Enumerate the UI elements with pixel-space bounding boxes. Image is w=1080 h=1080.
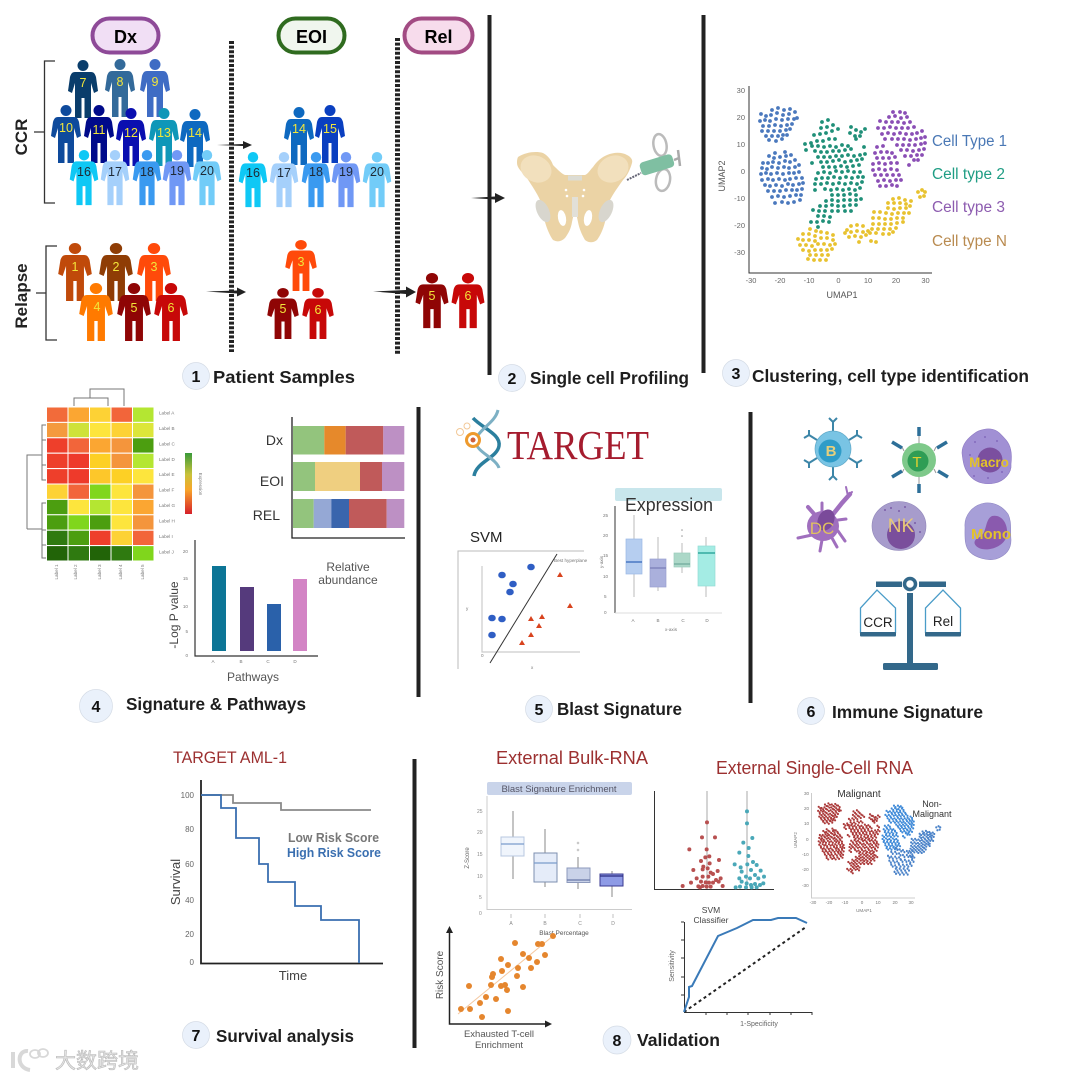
patients: Dx CCR: 11 [93,123,106,137]
chart: UMAP clusters: 20 [892,276,900,285]
patients: EOI CCR: 16 [246,166,260,180]
patients: EOI CCR: 19 [339,165,353,179]
chart: expression box plot: 10 [603,574,609,579]
icon: bone marrow syringe [627,133,680,192]
patients: Dx CCR: 20 [200,164,214,178]
heading: clustering [722,360,1029,386]
chart: malignant vs non-malignant UMAP: -30 [810,900,817,905]
chart: heatmap: Label 1 [54,564,59,580]
chart: stacked bars relative abundance: Dx [266,432,283,448]
panel: 1 patient samples [12,18,484,390]
patients: EOI relapse [267,240,334,339]
legend: cell types: Cell type 3 [932,199,1005,216]
patients: EOI relapse: 3 [298,255,305,269]
chart: heatmap: Label A [159,410,175,416]
patients: Dx relapse: 6 [168,301,175,315]
chart: malignant vs non-malignant UMAP: 30 [908,900,914,905]
chart: malignant vs non-malignant UMAP: 30 [804,791,810,796]
chart: SVM classifier ROC [669,905,812,1028]
chart: UMAP clusters: 10 [864,276,872,285]
heading: validation [603,1026,720,1054]
chart: expression box plot: A [631,618,635,623]
chart: expression box plot [599,488,722,632]
subtitle: External Single-Cell RNA: External Single-Cell RNA [716,758,913,778]
chart: risk score scatter [435,926,556,1051]
chart: Kaplan-Meier survival: High Risk Score [287,846,381,860]
patients: Dx CCR: 12 [124,126,138,140]
chart: malignant vs non-malignant UMAP: Non- [922,799,942,809]
patients: Dx CCR: 7 [80,76,87,90]
chart: malignant vs non-malignant UMAP: Malignant [912,809,952,819]
chart: malignant vs non-malignant UMAP: UMAP2 [793,832,798,848]
icon: macrophage [962,429,1011,484]
chart: blast signature enrichment box plot: D [611,921,615,927]
patients: Dx CCR [51,59,221,205]
heading: immune signature [798,698,983,724]
chart: UMAP clusters: UMAP2 [717,160,727,192]
heading: survival analysis: Survival analysis [216,1026,354,1046]
chart: malignant vs non-malignant UMAP: -10 [802,852,809,857]
chart: heatmap: Label B [159,426,175,431]
chart: malignant vs non-malignant UMAP: 10 [804,821,810,826]
icon: dendritic cell [798,487,852,551]
bracket: Relapse group: Relapse [12,263,31,329]
icon: balance CCR vs Rel: CCR [863,615,893,630]
patients: Dx CCR: 8 [117,75,124,89]
chart: heatmap: Label G [159,503,176,508]
chart: expression box plot: 5 [604,594,607,599]
chart: expression box plot: 25 [603,513,609,518]
chart: blast signature enrichment box plot: C [578,921,582,927]
chart: heatmap [27,389,203,580]
patients: Rel [416,273,484,328]
chart: blast signature enrichment box plot [465,782,632,937]
chart: heatmap: Label H [159,518,175,524]
heading: validation: Validation [637,1030,720,1050]
panel: 8 validation [435,748,952,1054]
chart: Kaplan-Meier survival: Time [279,968,307,983]
heading: validation: 8 [613,1033,622,1050]
chart: heatmap: Label J [159,550,174,554]
chart: malignant vs non-malignant UMAP [793,789,952,913]
patients: EOI CCR: 15 [323,122,337,136]
chart: SVM classifier ROC: Classifier [694,915,729,925]
chart: malignant vs non-malignant UMAP: UMAP1 [856,908,872,913]
chart: blast signature enrichment box plot: 25 [477,809,483,815]
heading: single cell profiling [498,364,689,392]
patients: Dx CCR: 10 [59,121,73,135]
heading: patient samples [182,362,355,390]
chart: blast signature enrichment box plot: 0 [479,911,482,917]
heading: blast signature: Blast Signature [557,699,682,719]
chart: heatmap: Label 3 [97,564,102,580]
pill: Rel [404,18,472,52]
patients: Dx CCR: 19 [170,164,184,178]
arrow: CCR Dx to EOI [217,141,252,149]
chart: malignant vs non-malignant UMAP: 0 [861,900,864,905]
chart: heatmap: Label E [159,472,175,477]
chart: Kaplan-Meier survival: 80 [185,825,195,834]
icon: balance CCR vs Rel: Rel [933,614,953,629]
chart: pathway bars: C [266,659,270,664]
patients: Dx CCR: 18 [140,165,154,179]
chart: malignant vs non-malignant UMAP: 10 [875,900,881,905]
icon: balance CCR vs Rel [860,578,961,670]
heading: blast signature: 5 [535,702,544,719]
chart: pathway bars: 5 [185,629,188,634]
chart: heatmap: Label 5 [140,564,145,580]
heading: immune signature: Immune Signature [832,702,983,722]
chart: SVM: x [531,665,534,670]
heading: signature and pathways: 4 [92,699,101,716]
chart: heatmap: Label I [159,534,173,539]
chart: UMAP clusters: 0 [741,167,745,176]
patients: Dx relapse: 5 [131,301,138,315]
icon: dendritic cell: DC [810,519,834,538]
chart: expression box plot: C [681,618,685,623]
icon: B cell [804,418,862,480]
watermark [13,1049,139,1073]
patients: EOI CCR: 17 [277,166,291,180]
chart: malignant vs non-malignant UMAP: 20 [892,900,898,905]
patients: EOI relapse: 6 [315,303,322,317]
chart: malignant vs non-malignant UMAP: -30 [802,883,809,888]
heading: survival analysis [182,1022,354,1048]
chart: Kaplan-Meier survival [168,780,383,983]
chart: UMAP clusters: -30 [746,276,756,285]
chart: blast signature enrichment box plot: Blast Signature Enrichment [501,784,617,795]
chart: pathway bars: -Log P value [167,581,181,649]
chart: malignant vs non-malignant UMAP: 20 [804,806,810,811]
chart: pathway bars: B [239,659,243,664]
patients: Dx relapse: 4 [94,300,101,314]
patients: Dx CCR: 17 [108,165,122,179]
chart: SVM: Best hyperplane [554,558,588,563]
bracket: CCR group [12,61,55,203]
icon: B cell: B [826,443,837,460]
chart: heatmap: Label F [159,488,175,492]
chart: Kaplan-Meier survival: Survival [168,859,183,905]
pill: Dx [92,18,158,52]
bracket: CCR group: CCR [12,119,31,155]
chart: expression box plot: 20 [603,533,609,538]
patients: Dx CCR: 13 [157,126,171,140]
arrow: relapse EOI to Rel [373,286,416,298]
heading: immune signature: 6 [807,704,816,721]
chart: heatmap: Label 2 [73,564,78,580]
chart: UMAP clusters: 10 [737,140,745,149]
chart: expression box plot: 0 [604,610,607,615]
chart: UMAP clusters: 20 [737,113,745,122]
legend: cell types: Cell Type 1 [932,133,1007,150]
chart: expression box plot: 15 [603,553,609,558]
chart: Kaplan-Meier survival: 40 [185,896,195,905]
chart: UMAP clusters: 30 [921,276,930,285]
heading: clustering: Clustering, cell type identification [752,366,1029,386]
chart: SVM: SVM [470,529,503,546]
chart: heatmap: Label 4 [118,564,123,580]
chart: stacked bars relative abundance: Relative [326,560,370,574]
icon: NK cell: NK [888,516,915,537]
chart: UMAP clusters: 30 [737,86,745,95]
chart: UMAP clusters: -30 [734,248,745,257]
chart: malignant vs non-malignant UMAP: -20 [802,867,809,872]
subtitle: TARGET AML-1: TARGET AML-1 [173,748,287,767]
legend: cell types [932,133,1007,250]
chart: UMAP clusters: -20 [734,221,745,230]
chart: SVM: y [466,606,469,611]
legend: cell types: Cell type 2 [932,166,1005,183]
chart: blast signature enrichment box plot: Blast Percentage [539,930,589,937]
chart: stacked bars relative abundance: EOI [260,473,284,489]
icon: pelvis bone [516,150,633,242]
arrow: into single cell profiling [471,193,505,203]
legend: cell types: Cell type N [932,233,1007,250]
heading: patient samples: Patient Samples [213,367,355,387]
heading: patient samples: 1 [192,369,201,386]
chart: blast signature enrichment box plot: 5 [479,895,482,901]
chart: SVM classifier ROC: SVM [702,905,720,915]
icon: monocyte: Mono [971,526,1011,543]
bracket: Relapse group [12,246,57,340]
patients: Dx CCR: 16 [77,165,91,179]
icon: T cell [892,427,948,493]
heading: clustering: 3 [732,366,741,383]
chart: SVM: 0 [481,653,484,658]
chart: expression box plot: Expression [625,494,713,515]
chart: blast signature enrichment box plot: 20 [477,830,483,836]
chart: pathway bars: 0 [185,653,188,658]
chart: SVM [458,529,588,670]
chart: blast signature enrichment box plot: A [509,921,513,927]
chart: expression box plot: B [656,618,660,623]
chart: heatmap: Label C [159,442,176,446]
chart: UMAP clusters: -20 [775,276,785,285]
chart: stacked bars relative abundance: abundance [318,573,378,587]
patients: EOI CCR [239,105,391,207]
chart: UMAP clusters: -10 [734,194,745,203]
panel: 5 blast signature [456,410,722,722]
arrow: relapse Dx to EOI [206,288,246,296]
heading: single cell profiling: Single cell Profiling [530,368,689,388]
chart: pathway bars [167,540,318,684]
icon: monocyte [965,503,1011,560]
chart: expression box plot: x-axis [665,627,678,632]
patients: EOI CCR: 20 [370,165,384,179]
chart: pathway bars: 20 [183,549,188,554]
patients: EOI relapse: 5 [280,302,287,316]
panel: 3 clustering [717,86,1029,386]
icon: T cell: T [912,454,922,471]
chart: risk score scatter: Exhausted T-cell [464,1029,534,1040]
logo: TARGET: TARGET [507,422,649,468]
panel: 4 signature and pathways [27,389,405,722]
chart: UMAP clusters: -10 [804,276,814,285]
patients: Dx relapse: 1 [72,260,79,274]
heading: single cell profiling: 2 [508,371,517,388]
chart: pathway bars: 10 [183,604,188,609]
patients: EOI CCR: 18 [309,165,323,179]
chart: blast signature enrichment box plot: Z-Score [465,847,471,869]
heading: signature and pathways [80,690,306,722]
chart: UMAP clusters [717,86,932,300]
chart: SVM classifier ROC: 1-Specificity [740,1021,778,1028]
panel: 6 immune signature [798,418,1011,724]
chart: SVM classifier ROC: Sensitivity [669,950,676,982]
chart: pathway bars: D [293,659,297,664]
chart: malignant vs non-malignant UMAP: 0 [806,837,809,842]
chart: stacked bars relative abundance: REL [253,507,280,523]
chart: malignant vs non-malignant UMAP: -10 [842,900,849,905]
chart: Kaplan-Meier survival: 0 [190,958,195,967]
chart: blast signature enrichment box plot: 10 [477,874,483,880]
chart: malignant vs non-malignant UMAP: -20 [826,900,833,905]
chart: heatmap: Expression [198,473,203,496]
chart: expression box plot: y-axis [599,555,604,568]
chart: UMAP clusters: 0 [836,276,841,285]
patients: Dx relapse: 3 [151,260,158,274]
patients: EOI CCR: 14 [292,122,306,136]
heading: survival analysis: 7 [192,1028,201,1045]
watermark: 大数跨境 [55,1050,139,1073]
chart: Kaplan-Meier survival: 100 [181,791,195,800]
chart: Kaplan-Meier survival: 20 [185,930,195,939]
chart: malignant vs non-malignant UMAP: Malignant [837,789,881,800]
chart: stacked bars relative abundance [253,417,405,587]
pill: EOI [278,18,344,52]
chart: expression box plot: D [705,618,709,623]
pill: EOI: EOI [296,27,327,47]
patients: Dx relapse: 2 [113,260,120,274]
pill: Rel: Rel [424,27,453,47]
chart: Kaplan-Meier survival: Low Risk Score [288,831,379,845]
patients: Rel: 5 [429,289,436,303]
chart: risk score scatter: Enrichment [475,1040,523,1051]
chart: UMAP clusters: UMAP1 [826,290,858,300]
chart: blast signature enrichment box plot: B [543,921,547,927]
icon: macrophage: Macro [969,455,1009,470]
chart: Kaplan-Meier survival: 60 [185,860,195,869]
chart: violin dots [654,791,774,890]
pill: Dx: Dx [114,27,137,47]
logo: TARGET [456,410,649,476]
chart: pathway bars: A [211,659,215,664]
chart: risk score scatter: Risk Score [435,950,446,999]
panel: 2 single cell profiling [498,133,689,392]
patients: Dx relapse [58,243,188,341]
chart: pathway bars: 15 [183,576,188,581]
subtitle: External Bulk-RNA: External Bulk-RNA [496,748,648,768]
chart: blast signature enrichment box plot: 15 [477,852,483,858]
icon: NK cell [872,502,926,550]
patients: Dx CCR: 9 [152,75,159,89]
chart: pathway bars: Pathways [227,670,279,684]
patients: Rel: 6 [465,289,472,303]
heading: blast signature [526,696,682,722]
chart: heatmap: Label D [159,457,176,462]
patients: Dx CCR: 14 [188,126,202,140]
heading: signature and pathways: Signature & Pathways [126,694,306,714]
panel: 7 survival analysis [168,748,383,1048]
